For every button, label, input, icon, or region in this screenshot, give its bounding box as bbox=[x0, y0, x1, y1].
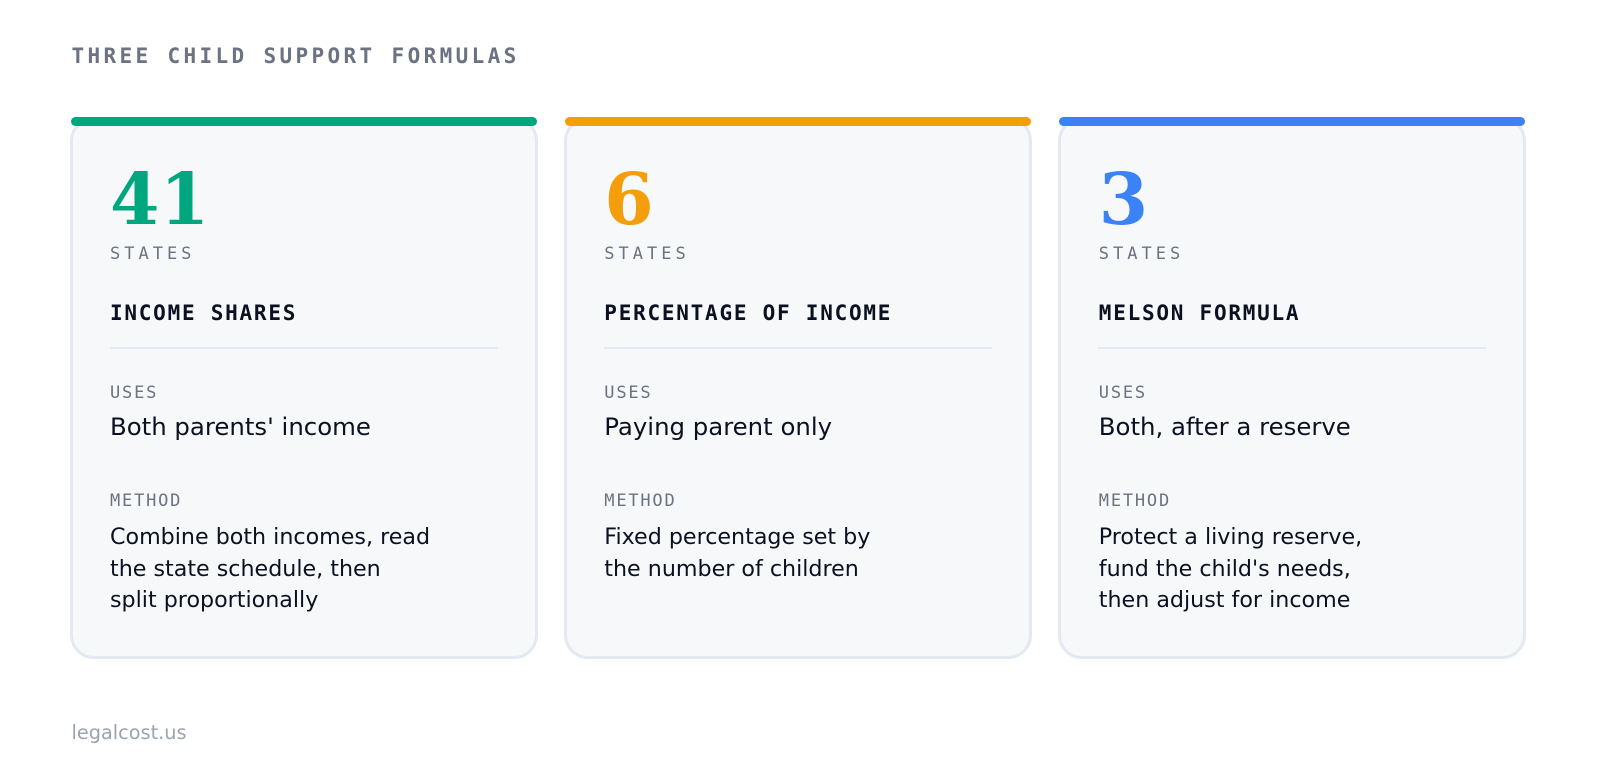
method text: Combine both incomes, read bbox=[110, 524, 430, 550]
formula name: INCOME SHARES bbox=[110, 301, 297, 325]
accent bar bbox=[1059, 117, 1525, 126]
states label: STATES bbox=[604, 244, 690, 264]
method text bbox=[604, 524, 870, 582]
method text: the state schedule, then bbox=[110, 556, 381, 582]
number: 41 states: 41 bbox=[110, 157, 210, 241]
title: THREE CHILD SUPPORT FORMULAS bbox=[72, 44, 520, 68]
card background bbox=[564, 117, 1032, 659]
uses label: USES bbox=[110, 383, 158, 403]
divider bbox=[604, 347, 992, 349]
divider bbox=[110, 347, 498, 349]
uses label: USES bbox=[604, 383, 652, 403]
accent bar bbox=[71, 117, 537, 126]
states label: STATES bbox=[110, 244, 195, 264]
method text: the number of children bbox=[604, 556, 859, 582]
method text: split proportionally bbox=[110, 587, 318, 613]
method label: METHOD bbox=[604, 491, 677, 511]
method label: METHOD bbox=[1099, 491, 1171, 511]
method text bbox=[110, 524, 430, 613]
accent bar bbox=[565, 117, 1031, 126]
states label: STATES bbox=[1099, 244, 1184, 264]
panel: income shares bbox=[70, 117, 538, 659]
method label: METHOD bbox=[110, 491, 182, 511]
method text: Fixed percentage set by bbox=[604, 524, 870, 550]
formula name: MELSON FORMULA bbox=[1099, 301, 1300, 325]
method text bbox=[1099, 524, 1362, 613]
method text: Protect a living reserve, bbox=[1099, 524, 1362, 550]
method text: then adjust for income bbox=[1099, 587, 1350, 613]
uses value: Both parents' income bbox=[110, 412, 371, 441]
card background bbox=[1058, 117, 1526, 659]
number: 6 states: 6 bbox=[604, 157, 654, 241]
panel: melson formula bbox=[1058, 117, 1526, 659]
panel: percentage of income bbox=[564, 117, 1032, 659]
uses label: USES bbox=[1099, 383, 1147, 403]
divider bbox=[1098, 347, 1486, 349]
method text: fund the child's needs, bbox=[1099, 556, 1351, 582]
uses value: Paying parent only bbox=[604, 412, 832, 441]
uses value: Both, after a reserve bbox=[1099, 412, 1351, 441]
card background bbox=[70, 117, 538, 659]
footer source: legalcost.us bbox=[72, 721, 187, 744]
formula name: PERCENTAGE OF INCOME bbox=[604, 301, 892, 325]
number: 3 states: 3 bbox=[1099, 157, 1149, 241]
